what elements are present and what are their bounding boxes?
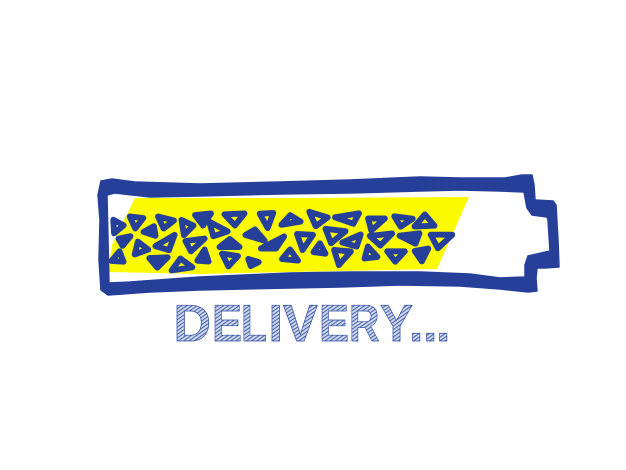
delivery label: . xyxy=(436,295,450,353)
delivery label: L xyxy=(241,295,267,353)
delivery label: Y xyxy=(380,295,413,353)
delivery label: R xyxy=(349,295,380,353)
delivery label: E xyxy=(319,295,349,353)
delivery label: V xyxy=(283,295,318,353)
yellow charge level xyxy=(108,197,469,274)
delivery label xyxy=(174,295,450,353)
battery outline xyxy=(98,175,559,295)
cargo triangles xyxy=(112,212,452,270)
delivery label: . xyxy=(409,295,423,353)
delivery label: I xyxy=(268,295,283,353)
delivery label: . xyxy=(423,295,437,353)
delivery label: D xyxy=(174,295,211,353)
delivery label: E xyxy=(212,295,242,353)
